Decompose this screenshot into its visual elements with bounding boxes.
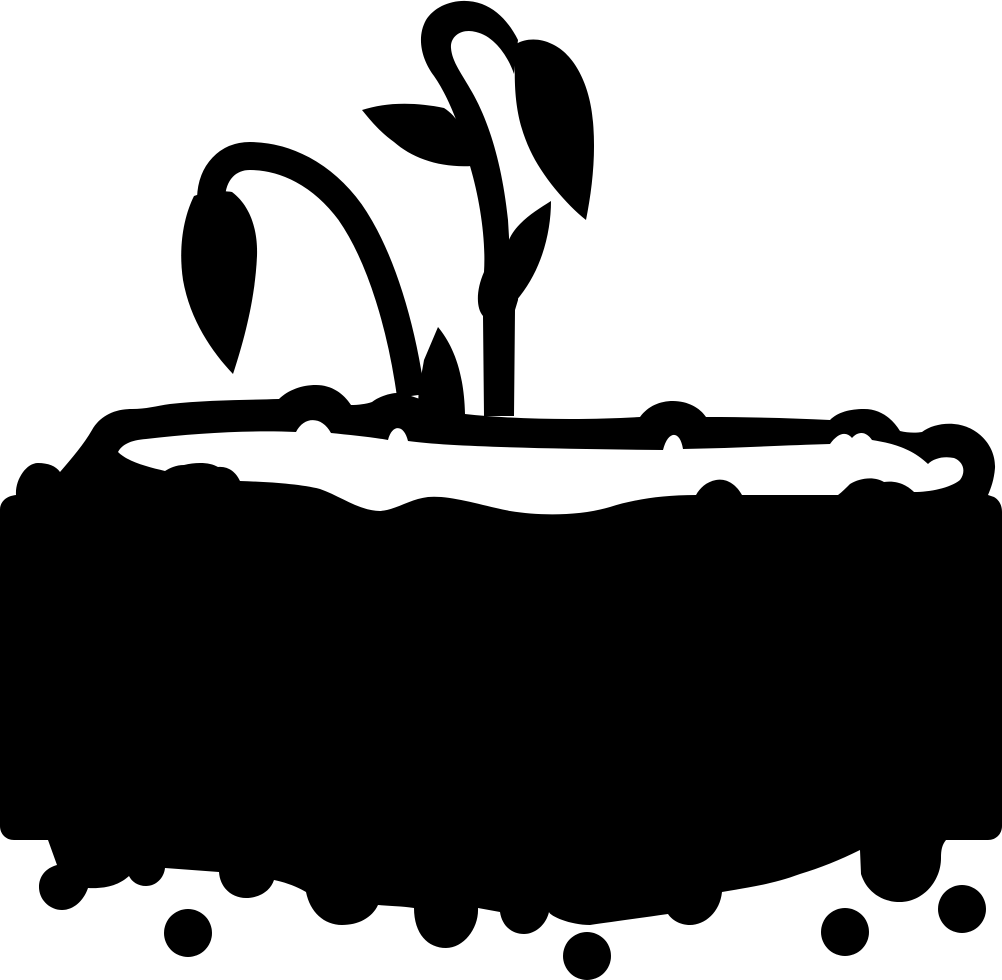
right stem base xyxy=(421,1,520,416)
particle xyxy=(821,908,869,956)
left side leaf xyxy=(362,104,472,166)
left drooping leaf xyxy=(181,191,257,374)
left stem xyxy=(211,156,411,396)
soil block with rim xyxy=(0,385,1002,948)
left wilting seedling xyxy=(181,156,465,414)
scattered soil particles xyxy=(164,885,986,980)
top drooping leaf xyxy=(515,40,594,220)
right wilting seedling xyxy=(362,1,594,416)
white hollow inside the rim xyxy=(118,420,963,514)
small leaf at left stem base xyxy=(418,327,465,414)
soil body outline xyxy=(0,385,1002,948)
particle xyxy=(938,885,986,933)
particle xyxy=(563,932,611,980)
particle xyxy=(164,909,212,957)
right lower leaf xyxy=(506,201,551,306)
